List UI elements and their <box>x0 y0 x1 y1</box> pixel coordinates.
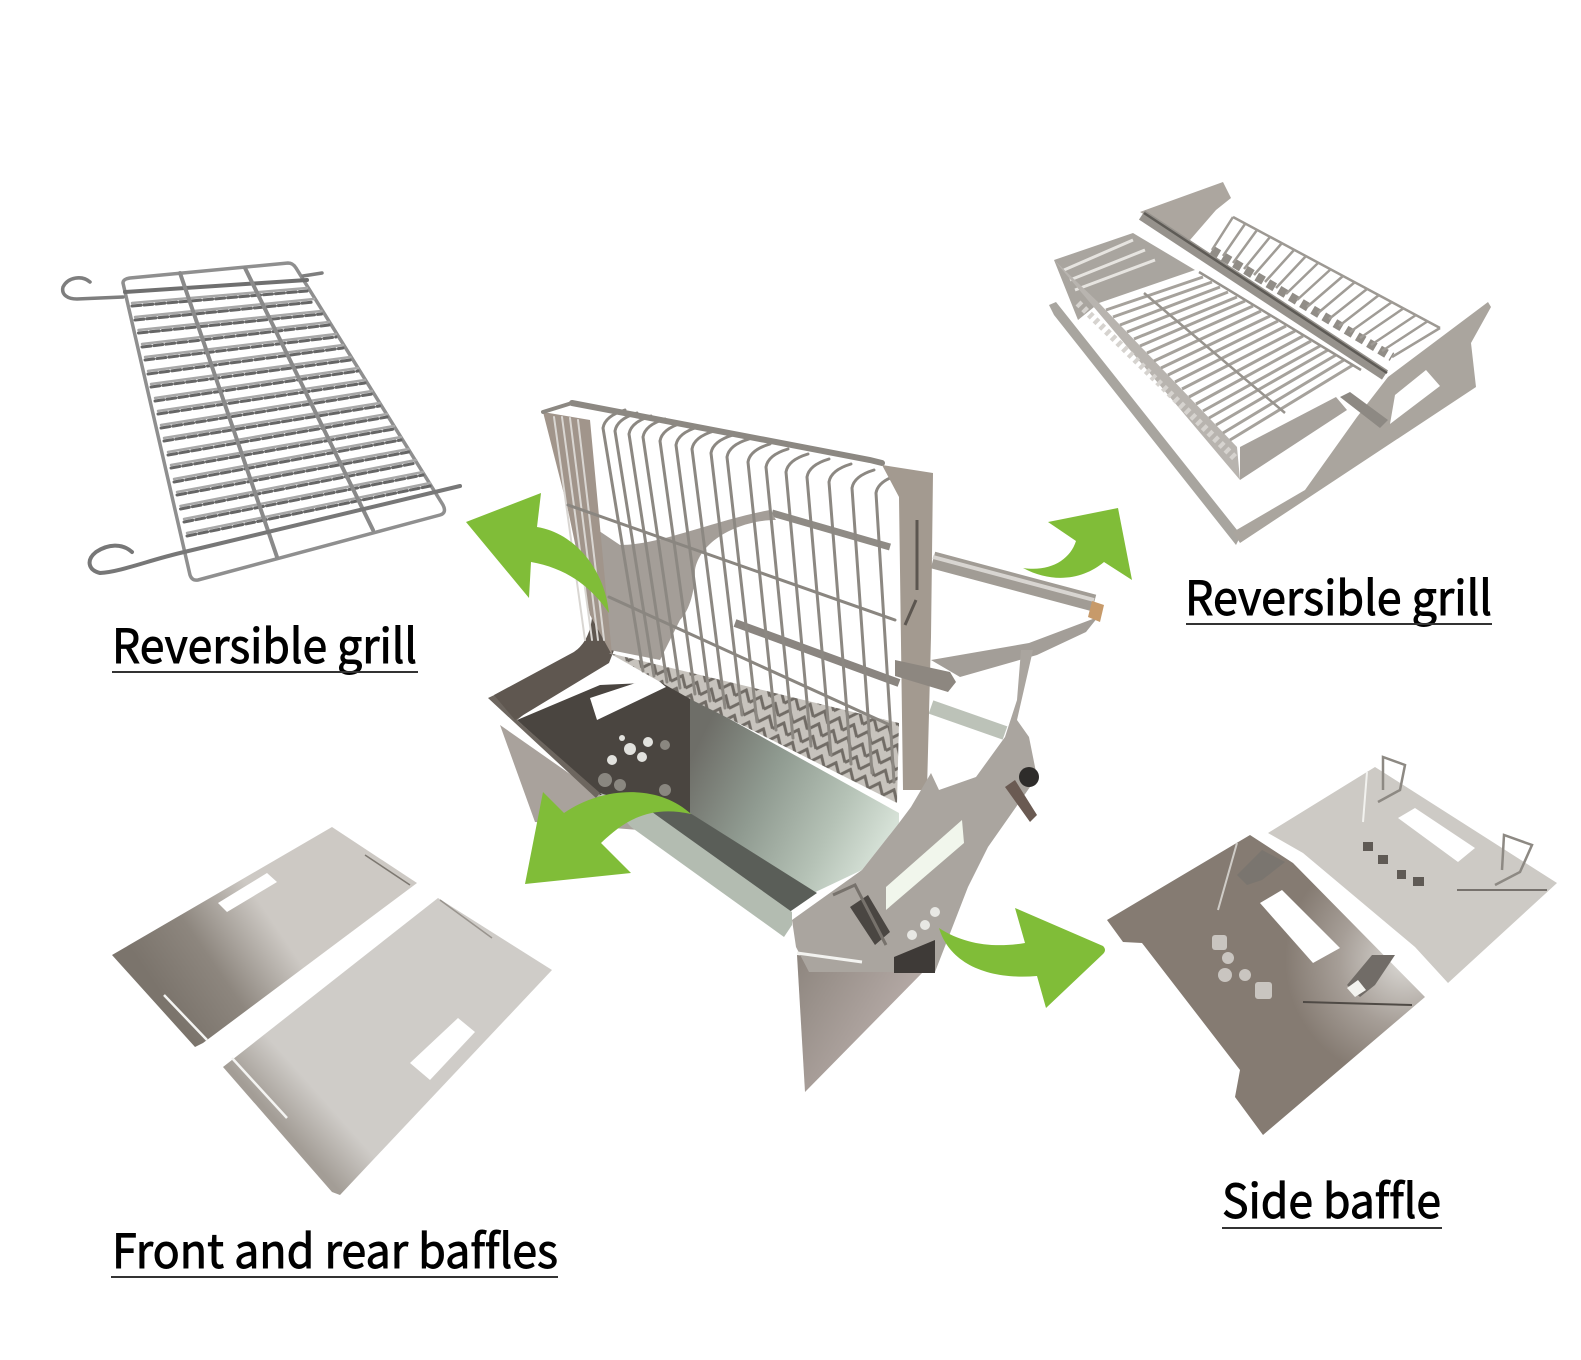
axle pin <box>895 660 956 692</box>
zigzag shelf <box>609 653 899 803</box>
icon: grill basket assembly <box>1049 182 1491 545</box>
panel: reversible grill top right <box>1049 182 1492 629</box>
arched support plate <box>568 510 776 660</box>
right upright bracket <box>882 465 933 790</box>
heading: reversible grill: Reversible grill <box>1185 560 1492 629</box>
upper left arc bracket <box>494 617 618 720</box>
panel: central grill assembly <box>488 403 1104 1092</box>
icon: side baffle plate front <box>1107 835 1425 1135</box>
arrow: to top left grill <box>466 493 609 613</box>
panel: reversible grill top left <box>63 263 460 677</box>
right end bracket <box>792 650 1039 973</box>
left leg <box>500 725 640 830</box>
panel: front and rear baffles <box>111 827 558 1282</box>
icon: side baffle plate rear <box>1268 757 1557 983</box>
icon: baffle plate rear <box>112 827 417 1047</box>
arrow: to front and rear baffles <box>525 792 691 884</box>
panel: side baffle <box>1107 757 1557 1232</box>
front leg <box>797 955 925 1092</box>
arrow: to top right grill <box>1023 508 1132 580</box>
heading: side baffle: Side baffle <box>1222 1163 1441 1232</box>
left side of upright grill <box>543 412 612 655</box>
arrow: to side baffle <box>939 908 1105 1008</box>
heading: reversible grill: Reversible grill <box>112 608 417 677</box>
heading: front and rear baffles: Front and rear baffles <box>112 1213 558 1282</box>
rods and rear tubes <box>735 513 1104 733</box>
icon: flat wire grill <box>63 263 460 580</box>
icon: baffle plate front <box>223 898 552 1195</box>
tray interior and floor <box>488 668 899 937</box>
upright grill wires <box>543 403 898 782</box>
